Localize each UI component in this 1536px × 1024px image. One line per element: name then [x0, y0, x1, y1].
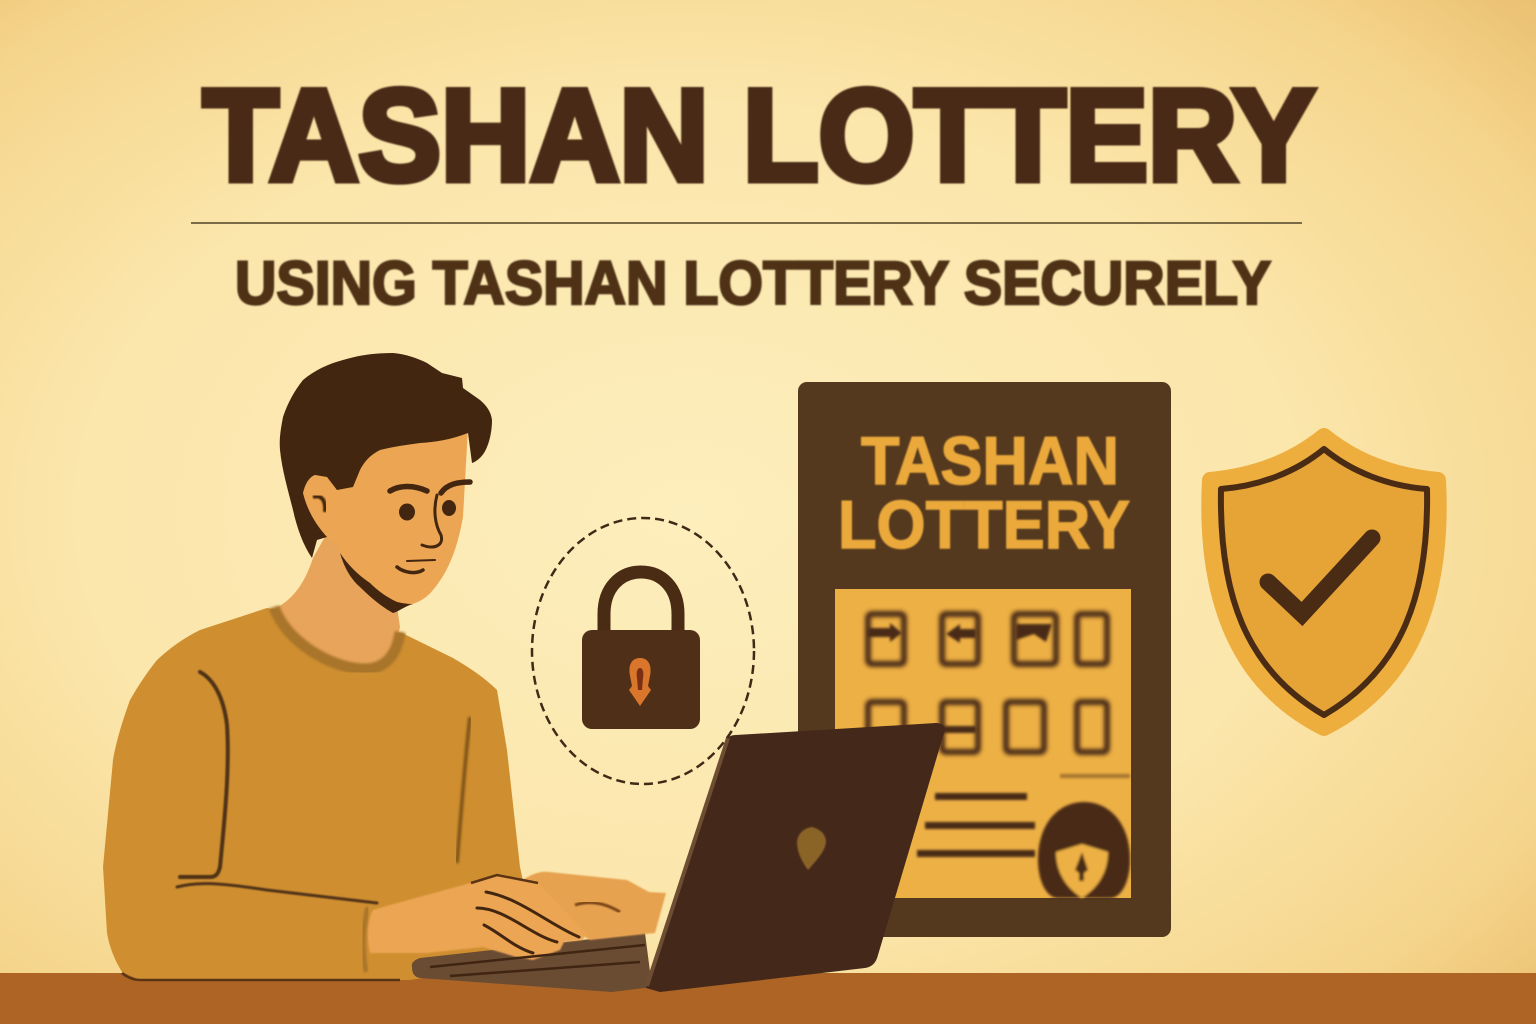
jaw shadow	[340, 553, 413, 613]
collar	[274, 607, 400, 669]
brows	[390, 482, 470, 493]
tablet title: TASHAN	[861, 423, 1119, 499]
tablet screen	[835, 589, 1131, 898]
nose	[422, 495, 442, 547]
hair	[280, 353, 492, 558]
small shield badge	[1038, 802, 1130, 898]
icon: shield with check	[1209, 436, 1439, 728]
person	[103, 353, 540, 980]
head	[325, 415, 468, 612]
arm creases	[177, 672, 377, 903]
table	[0, 973, 1536, 1024]
form lines	[917, 774, 1130, 857]
ear	[303, 475, 336, 545]
hand: back	[523, 872, 666, 940]
tablet panel	[798, 382, 1171, 937]
title: TASHAN LOTTERY	[203, 62, 1315, 208]
tablet title	[838, 423, 1130, 563]
laptop logo	[797, 827, 826, 870]
icon: padlock in dashed circle	[532, 518, 754, 784]
laptop	[368, 723, 945, 992]
sweater table shadow	[122, 973, 400, 980]
laptop lid	[646, 723, 945, 992]
number grid	[868, 614, 1107, 752]
neck	[278, 510, 400, 665]
keyboard base	[412, 933, 652, 992]
hand: front	[368, 875, 586, 960]
subtitle: USING TASHAN LOTTERY SECURELY	[235, 249, 1271, 317]
eyes	[399, 504, 415, 520]
sweater	[103, 608, 540, 980]
tablet title: LOTTERY	[838, 487, 1130, 563]
mouth	[407, 560, 435, 561]
